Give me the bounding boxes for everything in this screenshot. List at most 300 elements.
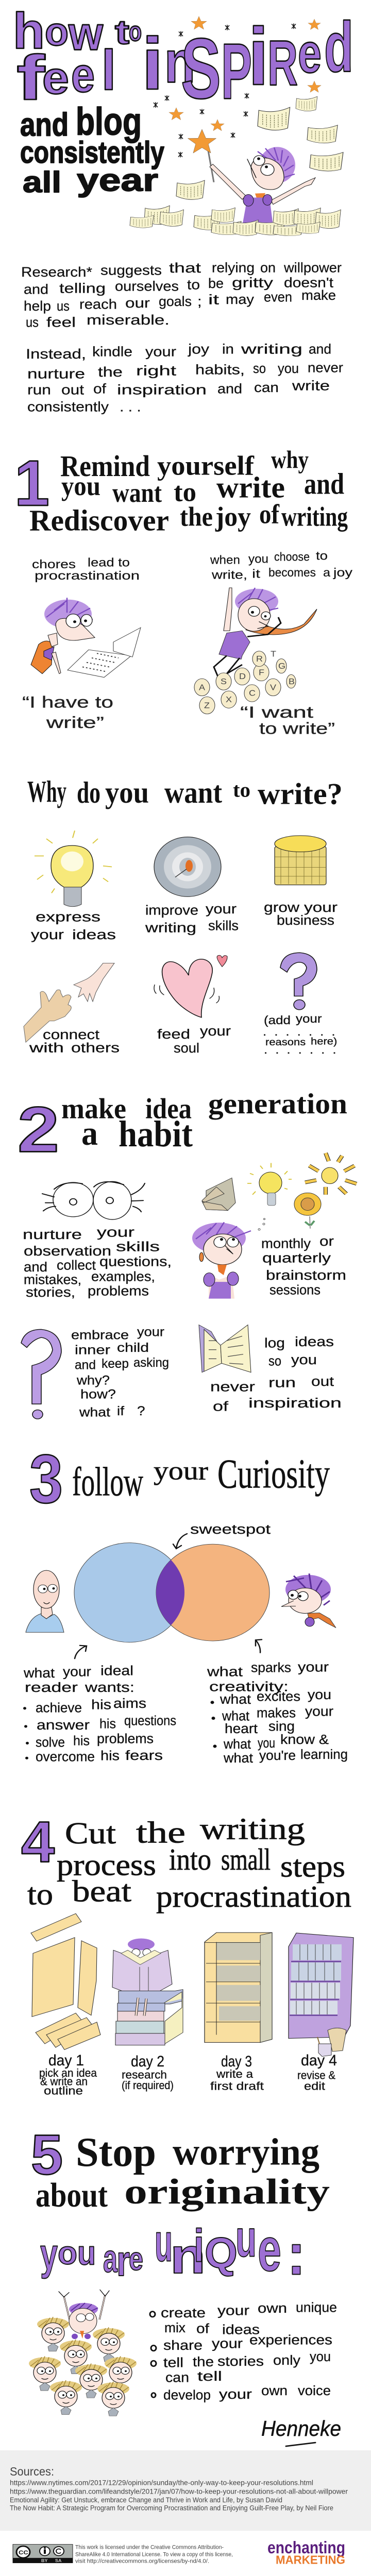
section 5 heading: originality xyxy=(124,2172,330,2212)
section 1 xyxy=(14,445,353,738)
list text: reader wants: what xyxy=(23,1665,55,1681)
subtitle: and blog consistently all year: year xyxy=(77,162,158,197)
section 1 heading: of xyxy=(259,500,280,530)
bullet text: can xyxy=(165,2369,189,2385)
caption: improve your writing skills: skills xyxy=(208,918,239,933)
logo: enchanting marketing: enchanting xyxy=(267,2538,345,2557)
heading: you are unique: e xyxy=(258,2215,281,2284)
caption: express your ideas: express xyxy=(36,909,100,924)
logo: enchanting marketing: MARKETING xyxy=(276,2554,345,2567)
intro text paragraph 1: that xyxy=(169,261,201,276)
text: embrace your inner child: your xyxy=(137,1325,164,1339)
heading: you are unique: u xyxy=(155,2213,173,2273)
caption: add your reasons here: (add xyxy=(264,1014,291,1027)
text: nurture your observation skills: skills xyxy=(116,1239,160,1254)
caption: day 4: day 4 xyxy=(301,2052,337,2069)
caption: express your ideas: ideas xyxy=(72,927,116,942)
section 2 heading: a xyxy=(81,1114,98,1153)
illustration: small light bulb xyxy=(247,1163,292,1206)
caption: day 2: (if required) xyxy=(122,2079,174,2091)
caption: connect with others: with xyxy=(29,1040,64,1055)
caption: day 1: day 1 xyxy=(48,2052,84,2069)
text: nurture your observation skills: your xyxy=(97,1224,134,1240)
intro text paragraph 2: writing xyxy=(241,342,302,357)
list text: reader wants: ideal xyxy=(100,1663,133,1678)
icon: pink heart xyxy=(154,955,227,1018)
heading: why do you want to write: Why xyxy=(27,774,66,808)
text: log ideas so you never run out of inspiration: run xyxy=(268,1375,296,1390)
illustration: wide open eyes xyxy=(42,1181,145,1219)
venn circle: writer xyxy=(156,1544,269,1641)
caption: grow your business: your xyxy=(304,900,338,915)
intro text paragraph 2: your xyxy=(145,344,176,360)
caption: when you choose to write, it becomes a joy: write, xyxy=(211,569,247,582)
title word: how: o xyxy=(45,9,69,54)
list text: reader wants: his xyxy=(100,1748,120,1763)
illustration: dancing woman on typewriter keys: S xyxy=(221,677,227,686)
caption: day 4: revise & xyxy=(297,2069,335,2081)
intro text paragraph 1: telling xyxy=(59,281,106,296)
text: embrace your inner child: if xyxy=(117,1404,125,1418)
license text: This work is licensed under the Creative Commons Attribution- xyxy=(75,2544,224,2550)
caption: day 1: outline xyxy=(44,2084,83,2097)
venn overlap: sweet spot xyxy=(156,1560,184,1625)
list text: creativity: your xyxy=(298,1659,329,1674)
intro text paragraph 2: kindle xyxy=(92,344,132,360)
panel: sources xyxy=(0,2450,371,2531)
bullet text: own xyxy=(261,2383,288,2398)
caption: express your ideas: your xyxy=(31,927,64,942)
intro text paragraph 1: help xyxy=(24,299,51,314)
list text: reader wants: his xyxy=(73,1733,90,1748)
illustration: dancing woman on typewriter keys: X xyxy=(226,695,232,704)
intro text paragraph 1: suggests xyxy=(100,263,162,278)
intro text paragraph 2: so xyxy=(253,361,266,377)
list text: reader wants: answer xyxy=(37,1717,90,1733)
intro text paragraph 1: miserable. xyxy=(87,313,170,328)
text: embrace your inner child: inner xyxy=(75,1343,110,1357)
intro text paragraph 2: of xyxy=(93,381,107,397)
heading: you are unique: u xyxy=(235,2209,257,2267)
intro text paragraph 1: be xyxy=(208,276,224,292)
intro text paragraph 1: even xyxy=(264,290,292,305)
caption: day 2: day 2 xyxy=(131,2053,164,2070)
list text: creativity: what xyxy=(223,1750,253,1766)
text: embrace your inner child: embrace xyxy=(71,1328,129,1342)
section 4 heading: procrastination xyxy=(156,1879,351,1913)
illustration: sun xyxy=(305,1153,357,1195)
caption: add your reasons here: ....... xyxy=(263,1025,343,1038)
text: embrace your inner child: ? xyxy=(137,1404,145,1418)
intro text paragraph 2: right xyxy=(136,363,176,379)
illustration: woman writer xyxy=(281,1573,336,1628)
intro text paragraph 1: to xyxy=(187,277,200,293)
caption: when you choose to write, it becomes a joy: when xyxy=(210,554,240,567)
caption: day 3: first draft xyxy=(210,2080,264,2092)
heading: you are unique: r xyxy=(116,2237,130,2285)
section: why do you want to write xyxy=(24,769,347,1057)
list text: reader wants: solve xyxy=(36,1734,65,1750)
list text: creativity: what xyxy=(207,1664,243,1679)
sources list: Emotional Agility: Get Unstuck, embrace Change and Thrive in Work and Life, by Susan David xyxy=(10,2496,282,2504)
caption: improve your writing skills: writing xyxy=(145,920,196,935)
section 5 heading: worrying xyxy=(173,2131,319,2173)
list text: creativity: what xyxy=(220,1691,251,1707)
icon: reaching hands xyxy=(24,963,114,1042)
quote: I have to write: write” xyxy=(46,714,104,732)
list text: reader wants: your xyxy=(63,1664,91,1679)
icon: target with arrow xyxy=(154,837,221,896)
list text: creativity: makes xyxy=(257,1705,296,1720)
caption: day 1: & write an xyxy=(40,2075,88,2088)
section 3 heading: follow xyxy=(72,1460,143,1504)
intro text paragraph 1: it xyxy=(208,292,219,308)
list text: creativity: excites xyxy=(257,1688,300,1704)
caption: when you choose to write, it becomes a joy: a xyxy=(323,566,330,580)
list: what your ideal reader wants xyxy=(23,1663,180,1764)
section 1 heading: want xyxy=(112,478,162,508)
caption: when you choose to write, it becomes a joy: it xyxy=(252,568,260,581)
bullet text: the xyxy=(193,2354,214,2369)
section 1 heading: and xyxy=(304,468,344,500)
illustration: woman with magic wand xyxy=(188,129,315,226)
title word: feel: l xyxy=(102,39,116,101)
intro text paragraph 2: you xyxy=(278,361,299,377)
list text: creativity: you're xyxy=(259,1748,296,1762)
bullet text: experiences xyxy=(249,2332,332,2347)
sources list: https://www.nytimes.com/2017/12/29/opinion/sunday/the-only-way-to-keep-your-resolutions.html xyxy=(10,2479,313,2487)
caption: day 2: research xyxy=(122,2069,167,2081)
list text: creativity: what xyxy=(222,1708,249,1723)
illustration: ideal reader xyxy=(26,1570,64,1632)
text: nurture your observation skills: observation xyxy=(24,1243,111,1259)
text: log ideas so you never run out of inspiration: so xyxy=(268,1353,281,1368)
title word: inspired: e xyxy=(298,22,322,84)
text: nurture your observation skills: examples, xyxy=(91,1268,155,1284)
intro text paragraph 2: write xyxy=(292,378,330,394)
license text: visit http://creativecommons.org/licenses/by-nd/4.0/. xyxy=(75,2557,209,2564)
list text: creativity: learning xyxy=(300,1747,348,1762)
illustration: dancing woman on typewriter keys: F xyxy=(259,668,264,677)
intro text paragraph 1: on xyxy=(260,260,276,276)
caption: when you choose to write, it becomes a joy: you xyxy=(248,553,268,566)
title word: inspired: S xyxy=(181,20,221,116)
bullet text: mix xyxy=(164,2320,185,2335)
caption: when you choose to write, it becomes a joy: joy xyxy=(333,566,353,580)
illustration: pile of pages xyxy=(130,206,341,236)
list text: reader wants: aims xyxy=(113,1696,146,1710)
illustration: crowd with unique woman xyxy=(29,2290,137,2416)
intro text paragraph 2: out xyxy=(61,382,84,398)
intro text paragraph 1: may xyxy=(226,292,254,307)
list text: reader wants: wants: xyxy=(85,1680,134,1695)
intro text paragraph 2: habits, xyxy=(195,362,245,378)
caption: grow your business: grow xyxy=(264,900,300,915)
quote: I have to write: “I have to xyxy=(22,693,113,711)
caption: feed your soul: soul xyxy=(174,1040,199,1056)
title word: feel: f xyxy=(16,42,45,113)
section 1 heading: joy xyxy=(215,502,251,532)
bullet text: only xyxy=(273,2352,301,2368)
heading: you are unique: o xyxy=(58,2235,77,2271)
arrow: to sweetspot xyxy=(173,1534,187,1549)
bullet text: share xyxy=(163,2337,203,2353)
title word: inspired: n xyxy=(164,29,195,95)
bullet text: tell xyxy=(197,2368,222,2383)
footer xyxy=(13,2538,347,2567)
illustration: day 1 planks xyxy=(31,1913,100,2049)
text: nurture your observation skills: questions, xyxy=(99,1253,172,1269)
text: embrace your inner child: how? xyxy=(80,1387,116,1401)
venn circle: reader xyxy=(74,1543,184,1642)
title word: inspired: P xyxy=(221,27,252,115)
icon: open notebook xyxy=(199,1325,251,1372)
illustration: dancing woman on typewriter keys: A xyxy=(199,683,206,692)
intro text paragraph 1: reach xyxy=(79,297,117,312)
text: log ideas so you never run out of inspiration: log xyxy=(264,1335,285,1350)
section 4 heading: small xyxy=(221,1842,271,1876)
caption: add your reasons here: your xyxy=(296,1013,322,1026)
illustration: dancing woman on typewriter keys: D xyxy=(239,672,246,681)
illustration: flying pages xyxy=(176,96,343,199)
heading: you are unique: a xyxy=(103,2237,118,2281)
heading: why do you want to write: do xyxy=(77,775,100,809)
intro text paragraph 1: willpower xyxy=(283,260,342,276)
illustration: dancing woman on typewriter keys: V xyxy=(270,683,277,692)
illustration: dancing woman on typewriter keys: R xyxy=(256,654,263,664)
arrow: to reader circle xyxy=(75,1646,87,1658)
illustration: dancing woman on typewriter keys: Z xyxy=(204,701,210,710)
heading: why do you want to write: to xyxy=(233,778,250,802)
heading: why do you want to write: you xyxy=(105,775,149,809)
illustration: dancing woman on typewriter keys: C xyxy=(249,689,256,698)
section 4 heading: beat xyxy=(72,1874,131,1908)
quote: I want to write: to write” xyxy=(259,719,335,738)
section 1 heading: the xyxy=(180,502,213,532)
bullet text: develop xyxy=(163,2387,211,2402)
caption: add your reasons here: reasons xyxy=(265,1037,306,1048)
caption: add your reasons here: ....... xyxy=(264,1043,344,1057)
list text: creativity: creativity: xyxy=(209,1679,289,1694)
icon: light bulb xyxy=(35,831,112,907)
section 3 xyxy=(23,1441,348,1766)
section 4 heading: the xyxy=(136,1815,185,1850)
intro text paragraph 1: goals xyxy=(159,294,192,310)
section 2 heading: habit xyxy=(119,1113,193,1155)
heading: you are unique: : xyxy=(287,2221,306,2287)
list: what sparks your creativity xyxy=(207,1659,348,1766)
intro text paragraph 2: run xyxy=(27,382,51,398)
bullet text: stories xyxy=(217,2353,264,2368)
heading: you are unique: y xyxy=(40,2230,58,2279)
bullet text: you xyxy=(310,2349,331,2364)
number 2: 2 xyxy=(18,1094,59,1165)
bullet rings xyxy=(150,2312,156,2397)
text: nurture your observation skills: stories, xyxy=(26,1284,75,1300)
text: embrace your inner child: keep xyxy=(102,1357,129,1371)
caption: day 4: edit xyxy=(304,2080,325,2092)
text: embrace your inner child: what xyxy=(79,1405,111,1419)
text: nurture your observation skills: and xyxy=(24,1259,47,1275)
illustration: thought bubbles xyxy=(258,1218,265,1230)
section 4 xyxy=(21,1810,354,2097)
caption: feed your soul: feed xyxy=(157,1026,190,1042)
bullet text: your xyxy=(217,2302,249,2318)
icon: big purple question mark xyxy=(21,1329,61,1419)
list text: reader wants: reader xyxy=(25,1680,78,1695)
icon: stack of coins xyxy=(275,836,326,885)
section 4 heading: process xyxy=(57,1848,156,1882)
list bullets: reader wants xyxy=(23,1707,29,1759)
section 4 heading: into xyxy=(169,1842,211,1876)
intro text paragraph 2: and xyxy=(309,342,331,357)
illustration: sunflower xyxy=(294,1193,321,1229)
section 5 xyxy=(29,2123,341,2446)
illustration: woman at laptop xyxy=(31,598,141,677)
section 1 heading: write xyxy=(216,471,285,504)
heading: why do you want to write: write? xyxy=(258,776,343,811)
caption: connect with others: connect xyxy=(43,1027,99,1042)
label: sweetspot: sweetspot xyxy=(190,1521,271,1537)
license text: ShareAlike 4.0 International License. To view a copy of this license, xyxy=(75,2551,233,2557)
caption: day 3: write a xyxy=(216,2067,254,2080)
illustration: stars and sparkles xyxy=(154,16,321,157)
illustration: dancing woman on typewriter keys: B xyxy=(289,677,295,686)
title word: how: h xyxy=(13,3,45,59)
arrow: to writer circle xyxy=(256,1639,262,1653)
illustration: day 4 purple bookshelf xyxy=(289,1933,353,2057)
heading: you are unique: e xyxy=(129,2241,143,2277)
subtitle: and blog consistently all year: blog xyxy=(76,100,142,143)
section 1 heading: yourself xyxy=(157,451,255,481)
section 2 heading: generation xyxy=(208,1088,347,1120)
subtitle: and blog consistently all year: all xyxy=(23,166,61,199)
text: monthly or quarterly brainstorm sessions: monthly xyxy=(261,1235,311,1251)
text: log ideas so you never run out of inspiration: of xyxy=(213,1398,228,1414)
caption: connect with others: others xyxy=(71,1040,120,1055)
caption: chores lead to procrastination: lead to xyxy=(88,556,130,569)
list bullets: creativity xyxy=(210,1701,216,1748)
bullet text: unique xyxy=(296,2299,337,2315)
text: embrace your inner child: and xyxy=(75,1358,96,1372)
intro text paragraph 1: feel xyxy=(46,315,76,330)
list text: reader wants: his xyxy=(99,1716,116,1731)
signature: Henneke: Henneke xyxy=(261,2416,341,2441)
section 1 heading: you xyxy=(61,471,100,501)
caption: grow your business: business xyxy=(277,912,334,927)
caption: day 3: day 3 xyxy=(221,2053,252,2070)
illustration: thinking woman xyxy=(192,1222,251,1299)
bullet text: your xyxy=(219,2386,252,2402)
heading: you are unique: n xyxy=(170,2228,206,2283)
list text: creativity: sparks xyxy=(251,1659,291,1675)
venn diagram xyxy=(74,1543,269,1642)
intro text paragraph 1: ; xyxy=(197,294,202,310)
sources heading: Sources: xyxy=(10,2466,54,2479)
section 5 heading: about xyxy=(36,2176,108,2214)
list text: reader wants: his xyxy=(91,1697,111,1712)
number 1: 1 xyxy=(14,447,49,519)
bullet text: own xyxy=(258,2300,287,2316)
text: log ideas so you never run out of inspiration: inspiration xyxy=(248,1395,342,1411)
text: log ideas so you never run out of inspiration: never xyxy=(210,1379,255,1394)
text: log ideas so you never run out of inspiration: you xyxy=(291,1352,317,1367)
section 4 heading: steps xyxy=(280,1849,345,1883)
title: how to feel inspired xyxy=(13,3,353,116)
section 2 heading: idea xyxy=(145,1093,192,1125)
intro text paragraph 1: us xyxy=(57,299,70,314)
section 1 heading: why xyxy=(271,446,309,474)
text: nurture your observation skills: problems xyxy=(88,1283,149,1298)
icon: creative commons badge xyxy=(13,2545,73,2563)
caption: chores lead to procrastination: procrastination xyxy=(35,570,140,583)
caption: when you choose to write, it becomes a joy: choose xyxy=(274,551,310,564)
section 2 heading: make xyxy=(61,1093,126,1125)
bullet text: create xyxy=(161,2305,206,2320)
caption: improve your writing skills: your xyxy=(206,901,237,916)
icon: creative commons badge: SA xyxy=(55,2558,61,2563)
title word: inspired: R xyxy=(267,27,298,99)
text: log ideas so you never run out of inspiration: ideas xyxy=(295,1334,334,1349)
intro text paragraph 2: never xyxy=(308,360,343,376)
list text: creativity: sing xyxy=(268,1718,295,1734)
illustration: dancing woman on typewriter keys: G xyxy=(278,662,285,671)
list: ways to be unique xyxy=(150,2299,341,2402)
list text: creativity: heart xyxy=(225,1721,258,1736)
number 3: 3 xyxy=(29,1441,63,1517)
section 3 heading: your xyxy=(154,1456,208,1485)
text: log ideas so you never run out of inspiration: out xyxy=(311,1374,334,1389)
intro text paragraph 1: and xyxy=(24,282,48,297)
intro text paragraph 2: can xyxy=(254,380,279,395)
subtitle: and blog consistently all year: and xyxy=(20,107,69,143)
intro text paragraph 2: joy xyxy=(188,342,209,357)
text: nurture your observation skills: collect xyxy=(57,1257,96,1273)
intro text paragraph 1: ourselves xyxy=(115,279,179,294)
title word: to: t xyxy=(115,13,129,51)
section 2 xyxy=(18,1088,357,1419)
section 4 heading: to xyxy=(27,1877,53,1911)
number 5: 5 xyxy=(31,2123,63,2186)
bullet text: your xyxy=(212,2335,243,2351)
illustration: day 2 woman reading on books xyxy=(112,1939,183,2045)
title word: inspired: i xyxy=(248,11,268,102)
heading: you are unique: i xyxy=(194,2219,204,2272)
section 5 heading: Stop xyxy=(76,2129,156,2175)
caption: day 1: pick an idea xyxy=(39,2066,97,2079)
text: embrace your inner child: child xyxy=(117,1341,149,1355)
illustration: dancing woman on typewriter keys xyxy=(194,588,317,714)
list text: creativity: your xyxy=(305,1703,333,1719)
sources background xyxy=(0,2450,371,2531)
intro text paragraph 2: inspiration xyxy=(117,382,207,398)
title word: inspired: i xyxy=(142,23,163,105)
heading: you are unique: u xyxy=(77,2234,96,2272)
section 1 heading: Rediscover xyxy=(29,504,169,537)
caption: chores lead to procrastination: chores xyxy=(32,558,76,571)
list text: creativity: what xyxy=(223,1736,251,1751)
intro text paragraph 2: Instead, xyxy=(26,347,86,362)
illustration: open box xyxy=(202,1178,235,1210)
section 4 heading: writing xyxy=(200,1811,305,1845)
title word: feel: e xyxy=(71,47,95,103)
text: embrace your inner child: why? xyxy=(76,1373,110,1387)
text: nurture your observation skills: mistakes, xyxy=(24,1272,81,1287)
caption: when you choose to write, it becomes a joy: becomes xyxy=(268,566,316,580)
subtitle: and blog consistently all year: consistently xyxy=(20,135,164,170)
list text: reader wants: questions xyxy=(124,1713,176,1728)
caption: add your reasons here: here) xyxy=(311,1036,337,1047)
